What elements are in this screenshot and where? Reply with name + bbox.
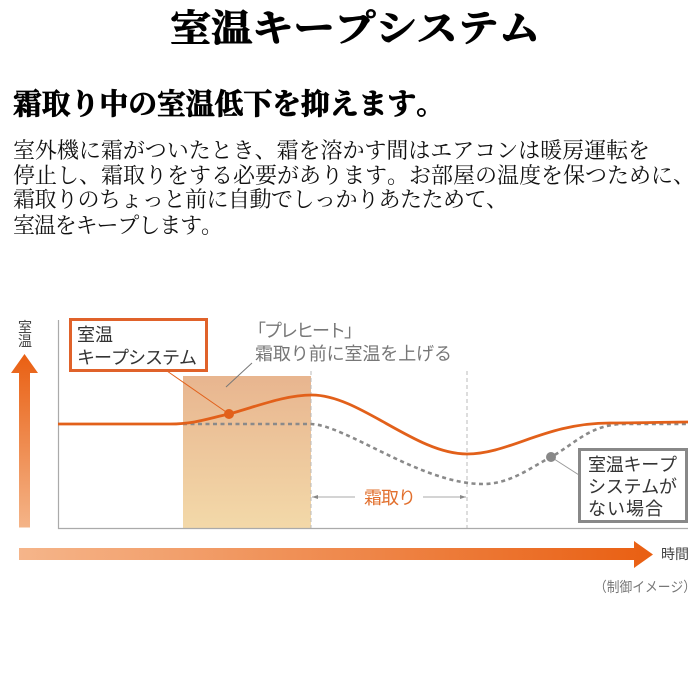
y axis label xyxy=(18,319,32,349)
body text xyxy=(13,138,695,238)
callout: room temperature keep system xyxy=(70,320,234,419)
y axis label: 室 xyxy=(18,319,32,335)
label: defrost span: 霜取り xyxy=(364,488,416,508)
label: defrost span xyxy=(312,488,466,508)
body text: 霜取りのちょっと前に自動でしっかりあたためて、 xyxy=(13,187,508,212)
body text: 室温をキープします。 xyxy=(13,213,223,238)
preheat band xyxy=(183,376,311,528)
callout: room temperature keep system: キープシステム xyxy=(77,348,197,368)
x axis arrow xyxy=(19,541,653,568)
title: 室温キープシステム xyxy=(170,8,540,50)
chart xyxy=(11,319,696,595)
solid curve: room temperature keep xyxy=(58,395,688,454)
annotation: preheat xyxy=(226,321,452,387)
body text: 室外機に霜がついたとき、霜を溶かす間はエアコンは暖房運転を xyxy=(13,138,650,163)
callout: without system: 室温キープ xyxy=(588,455,677,475)
defrost boundaries xyxy=(311,371,467,528)
body text: 停止し、霜取りをする必要があります。お部屋の温度を保つために、 xyxy=(13,163,695,188)
callout: without system: システムが xyxy=(588,477,677,497)
chart axes xyxy=(58,320,688,528)
annotation: preheat: 「プレヒート」 xyxy=(248,321,362,341)
subheading: 霜取り中の室温低下を抑えます。 xyxy=(13,88,445,121)
annotation: preheat: 霜取り前に室温を上げる xyxy=(255,344,452,364)
x axis label: 時間 xyxy=(661,546,689,562)
callout: without system: ない場合 xyxy=(588,499,663,519)
dotted curve: without system xyxy=(183,424,688,484)
callout: room temperature keep system: 室温 xyxy=(77,325,113,345)
callout: without system xyxy=(546,450,686,522)
y axis label: 温 xyxy=(18,333,32,349)
y axis arrow xyxy=(11,354,38,528)
